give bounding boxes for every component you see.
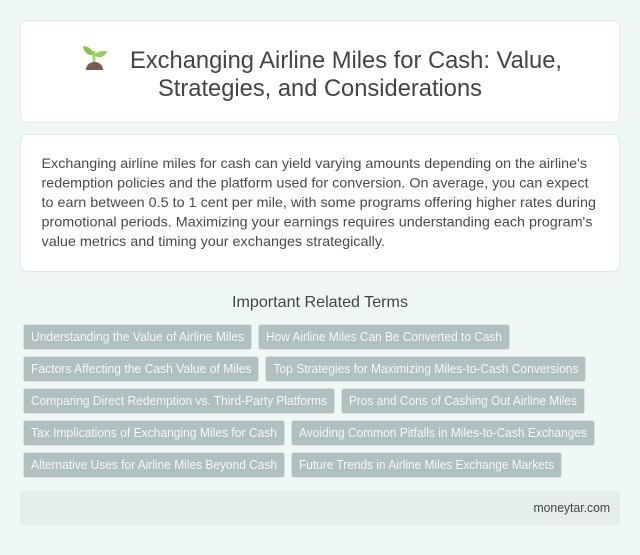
chip: pitfalls: Avoiding Common Pitfalls in Miles-to-Cash Exchanges <box>299 426 587 440</box>
chip: understanding value: Understanding the Value of Airline Miles <box>31 330 244 344</box>
panel: description <box>20 134 620 272</box>
icon: seedling <box>83 46 107 70</box>
chip: alternative uses: Alternative Uses for Airline Miles Beyond Cash <box>31 458 277 472</box>
chip: tax: Tax Implications of Exchanging Miles for Cash <box>31 426 277 440</box>
text block: description: redemption policies and the platform used for conversion. On average, you can expect <box>42 174 589 190</box>
heading: related terms: Important Related Terms <box>232 294 408 311</box>
chip: pitfalls <box>292 420 594 446</box>
chip: conversion: How Airline Miles Can Be Converted to Cash <box>266 330 502 344</box>
text block: description: value metrics and timing your exchanges strategically. <box>42 233 385 249</box>
text block: description: promotional periods. Maximizing your earnings requires understanding each program's <box>42 214 592 230</box>
panel: header <box>20 20 620 122</box>
text block: description <box>42 155 596 249</box>
chip: comparing <box>24 388 334 414</box>
text block: description: Exchanging airline miles for cash can yield varying amounts depending on the airline's <box>42 155 587 171</box>
chip: future trends: Future Trends in Airline Miles Exchange Markets <box>299 458 554 472</box>
footer: moneytar.com <box>534 501 610 515</box>
chip: pros and cons: Pros and Cons of Cashing Out Airline Miles <box>349 394 577 408</box>
chip: alternative uses <box>24 452 284 478</box>
title <box>130 47 562 102</box>
chip: tax <box>24 420 284 446</box>
chip: understanding value <box>24 324 252 350</box>
chip: comparing: Comparing Direct Redemption vs. Third-Party Platforms <box>31 394 327 408</box>
chip: top strategies: Top Strategies for Maximizing Miles-to-Cash Conversions <box>274 362 578 376</box>
chip: future trends <box>292 452 562 478</box>
title: Strategies, and Considerations <box>158 75 482 102</box>
text block: description: to earn between 0.5 to 1 cent per mile, with some programs offering higher rates during <box>42 194 596 210</box>
chip: factors <box>24 356 258 382</box>
chip: pros and cons <box>342 388 584 414</box>
footer <box>20 491 620 525</box>
chip: factors: Factors Affecting the Cash Value of Miles <box>31 362 252 376</box>
chip: top strategies <box>266 356 586 382</box>
chip: conversion <box>258 324 510 350</box>
title: Exchanging Airline Miles for Cash: Value, <box>130 47 562 74</box>
